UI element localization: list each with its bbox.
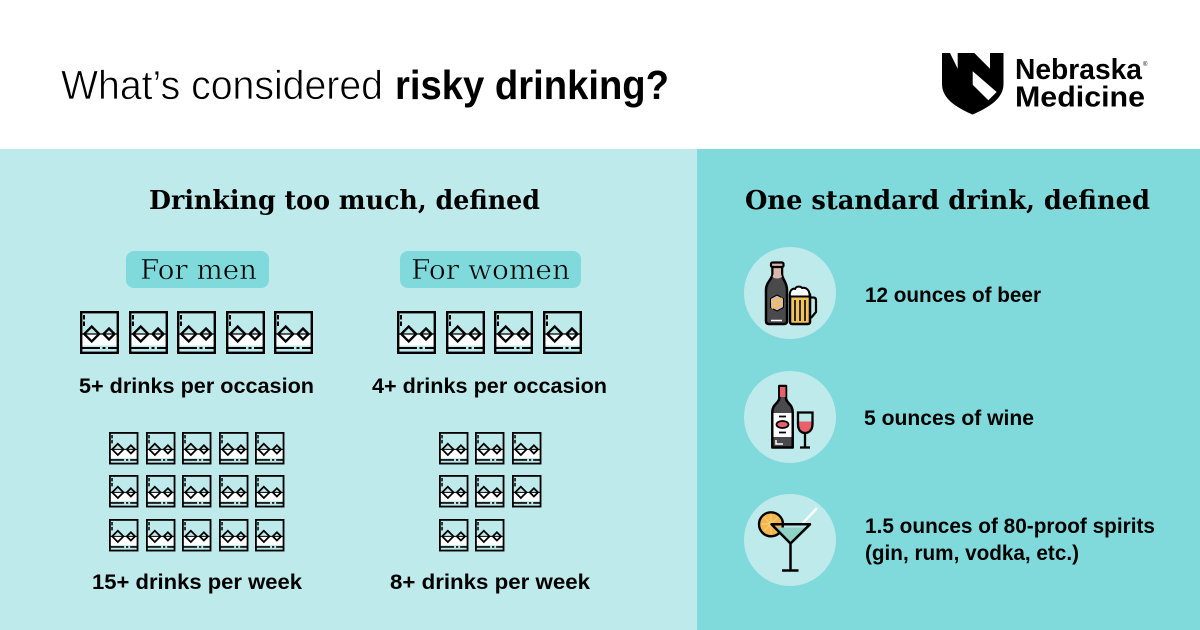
men: 5 drink glasses xyxy=(81,312,312,353)
logo: Nebraska Medicine: Medicine xyxy=(1015,82,1145,114)
women: 8 drink glasses xyxy=(440,433,541,551)
heading: one standard drink: One standard drink, defined xyxy=(745,186,1150,216)
pill: for women: For women xyxy=(411,255,570,286)
title xyxy=(61,62,669,108)
text: spirits xyxy=(865,515,1155,565)
logo: Nebraska Medicine xyxy=(942,53,1148,114)
logo: Nebraska Medicine: Nebraska xyxy=(1015,54,1143,86)
logo: Nebraska Medicine: ® xyxy=(1143,61,1148,68)
icon: beer xyxy=(744,247,836,339)
text: beer: 12 ounces of beer xyxy=(865,284,1041,307)
label: women per occasion: 4+ drinks per occasion xyxy=(372,375,607,398)
text: spirits: 1.5 ounces of 80-proof spirits xyxy=(865,515,1155,538)
pill: for men: For men xyxy=(140,255,257,286)
text: spirits: (gin, rum, vodka, etc.) xyxy=(865,542,1079,565)
panel: drinking too much xyxy=(0,149,697,630)
panel: one standard drink xyxy=(697,149,1200,630)
title: risky drinking? xyxy=(395,62,669,108)
heading: drinking too much: Drinking too much, defined xyxy=(149,186,540,216)
label: men per occasion: 5+ drinks per occasion xyxy=(79,375,314,398)
women: 4 drink glasses xyxy=(398,312,581,353)
icon: wine xyxy=(744,371,836,463)
label: men per week: 15+ drinks per week xyxy=(92,571,302,594)
text: wine: 5 ounces of wine xyxy=(864,407,1034,430)
label: women per week: 8+ drinks per week xyxy=(390,571,590,594)
men: 15 drink glasses xyxy=(110,433,284,551)
icon: cocktail xyxy=(744,494,836,586)
pill: for men xyxy=(126,251,269,288)
title: What’s considered xyxy=(61,62,383,108)
